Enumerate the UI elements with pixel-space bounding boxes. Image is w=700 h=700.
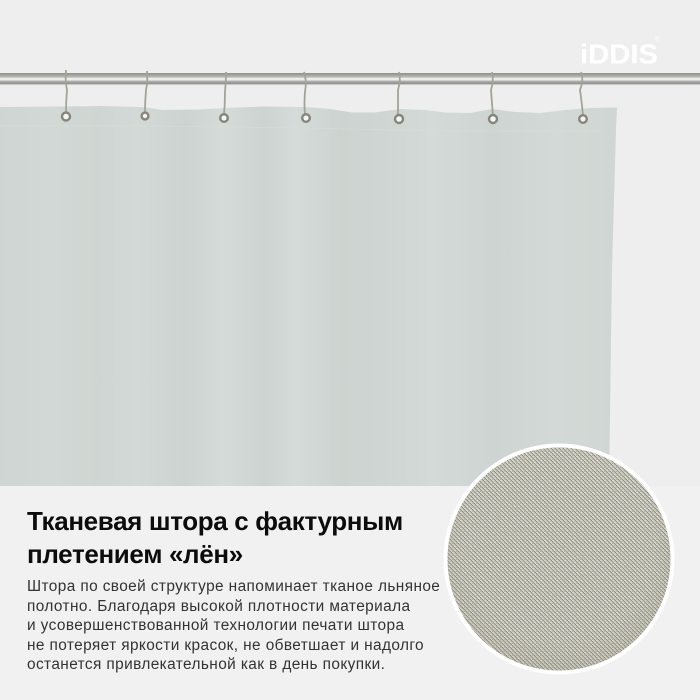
body text: полотно. Благодаря высокой плотности материала <box>27 598 410 615</box>
bottom panel background <box>0 486 700 700</box>
body text: останется привлекательной как в день покупки. <box>27 656 385 673</box>
hooks and grommets <box>62 70 587 123</box>
heading <box>27 506 403 569</box>
curtain rod <box>0 73 700 84</box>
body text: Штора по своей структуре напоминает тканое льняное <box>27 578 440 595</box>
body text: и усовершенствованной технологии печати штора <box>27 617 404 634</box>
logo: ® <box>655 36 660 43</box>
heading: Тканевая штора с фактурным <box>27 506 403 536</box>
curtain fabric <box>0 106 617 486</box>
fabric texture swatch <box>444 444 674 674</box>
logo: iDDIS <box>580 38 658 70</box>
body text <box>27 578 440 673</box>
heading: плетением «лён» <box>27 539 243 569</box>
body text: не потеряет яркости красок, не обветшает и надолго <box>27 637 424 654</box>
